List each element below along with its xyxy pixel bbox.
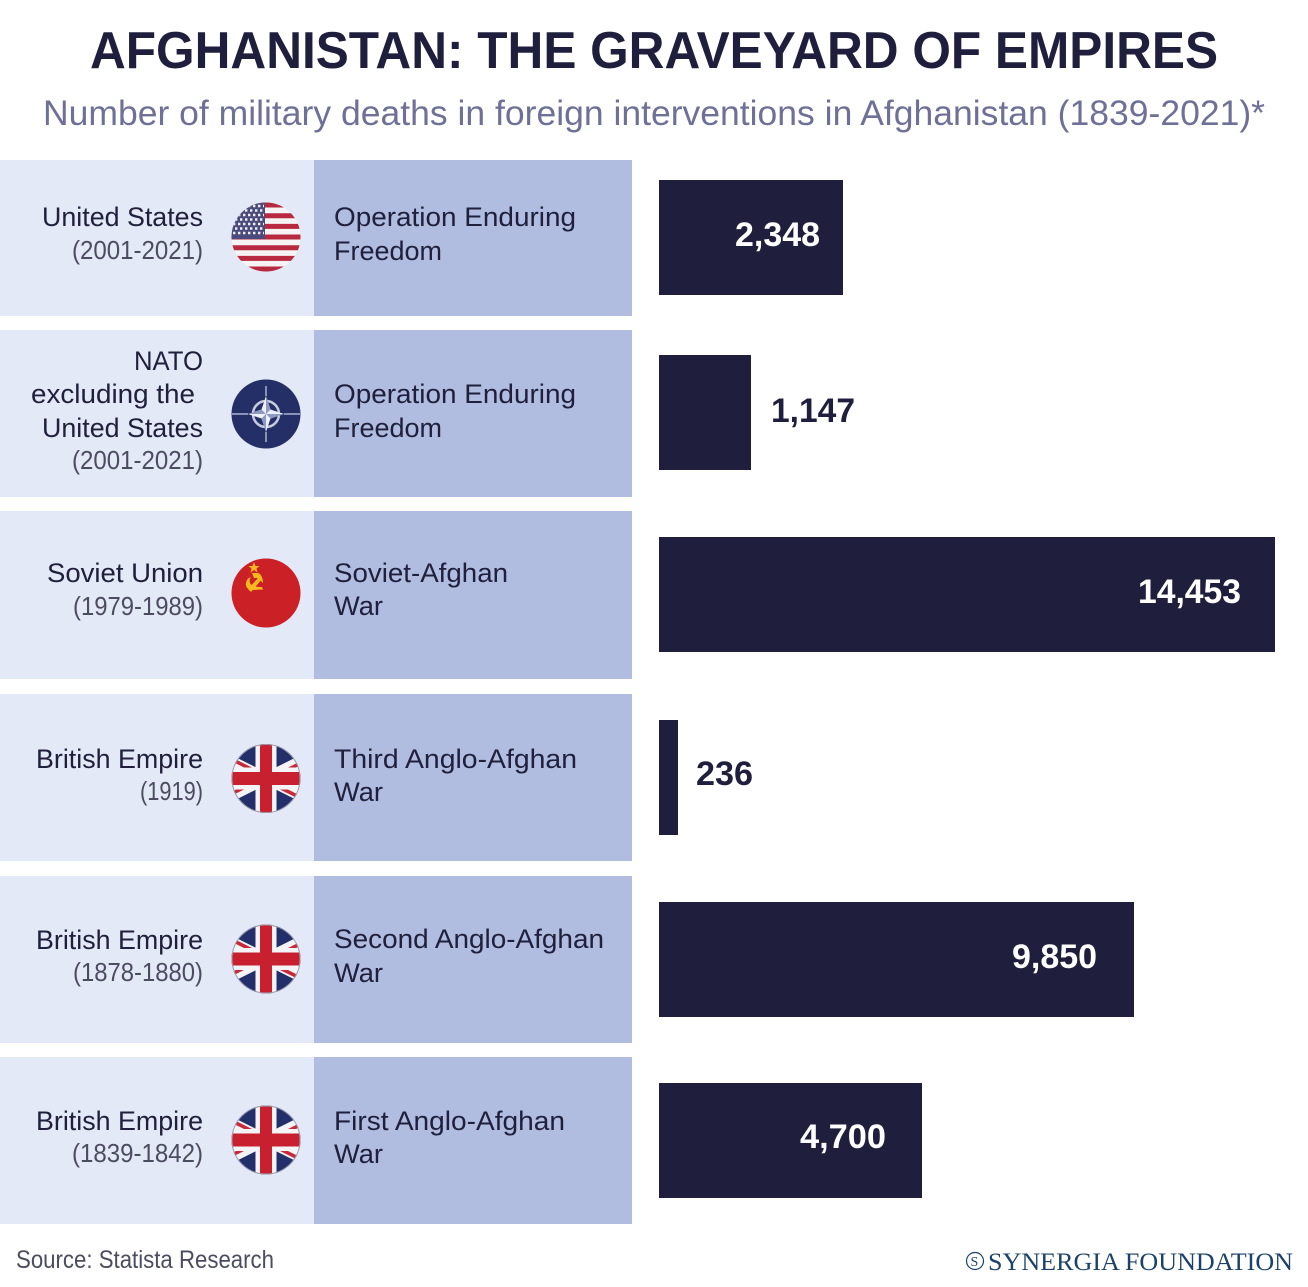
icon: UK flag (196, 742, 336, 816)
conflict names: War (334, 777, 383, 807)
row: First Anglo-Afghan War (0, 1057, 632, 1224)
row: NATO: NATO (134, 346, 203, 376)
icon: Soviet flag (232, 558, 300, 628)
icon: NATO flag (232, 380, 300, 448)
row: Second Anglo-Afghan War: British Empire (36, 925, 203, 955)
title: AFGHANISTAN: THE GRAVEYARD OF EMPIRES (90, 22, 1218, 80)
subtitle: Number of military deaths in foreign interventions in Afghanistan (1839-2021)* (43, 94, 1265, 133)
icon: US flag (231, 202, 301, 272)
conflict names: Freedom (334, 413, 442, 443)
row: Third Anglo-Afghan War: British Empire (36, 744, 203, 774)
bar: NATO 1,147: 1,147 (771, 392, 855, 430)
bar chart (659, 180, 1275, 1198)
conflict names: War (334, 1139, 383, 1169)
conflict names: Operation Enduring (334, 379, 576, 409)
conflict names: Operation Enduring (334, 202, 576, 232)
row: Second Anglo-Afghan War: (1878-1880) (73, 957, 203, 987)
icon: UK flag (196, 922, 336, 996)
row: NATO (0, 330, 632, 497)
row: United States (0, 160, 632, 316)
row: NATO: United States (42, 413, 203, 443)
bar: United States 2,348 (659, 180, 843, 295)
row: Third Anglo-Afghan War (0, 694, 632, 861)
row: Soviet Union: (1979-1989) (73, 591, 203, 621)
bar: Third war 236 (659, 720, 753, 835)
bar: Soviet Union 14,453: 14,453 (1138, 573, 1241, 611)
row: First Anglo-Afghan War: (1839-1842) (72, 1138, 203, 1168)
bar: Second war 9,850 (659, 902, 1134, 1017)
conflict names: Freedom (334, 236, 442, 266)
row: Second Anglo-Afghan War (0, 876, 632, 1043)
source note: Source: Statista Research (16, 1246, 274, 1274)
row: United States: United States (42, 202, 203, 232)
icon: UK flag (196, 1103, 336, 1177)
conflict names: Third Anglo-Afghan (334, 744, 577, 774)
row: Soviet Union: Soviet Union (47, 558, 203, 588)
conflict names: War (334, 958, 383, 988)
bar: First war 4,700: 4,700 (800, 1118, 886, 1156)
bar: First war 4,700 (659, 1083, 922, 1198)
conflict names (334, 202, 604, 1169)
row: First Anglo-Afghan War: British Empire (36, 1106, 203, 1136)
bar: Third war 236: 236 (696, 755, 753, 793)
bar: Soviet Union 14,453 (659, 537, 1275, 652)
logo: Synergia Foundation: S (970, 1255, 978, 1270)
conflict names: First Anglo-Afghan (334, 1106, 565, 1136)
row: Soviet Union (0, 511, 632, 679)
conflict names: Soviet-Afghan (334, 558, 508, 588)
bar: NATO 1,147 (659, 355, 855, 470)
row: NATO: (2001-2021) (72, 445, 203, 475)
conflict names: War (334, 591, 383, 621)
bar: Second war 9,850: 9,850 (1012, 938, 1097, 976)
row: NATO: excluding the (31, 379, 195, 409)
bar: United States 2,348: 2,348 (735, 216, 820, 254)
row: United States: (2001-2021) (72, 235, 203, 265)
logo: Synergia Foundation: SYNERGIA FOUNDATION (988, 1249, 1293, 1276)
conflict names: Second Anglo-Afghan (334, 924, 604, 954)
row: Third Anglo-Afghan War: (1919) (140, 776, 203, 806)
